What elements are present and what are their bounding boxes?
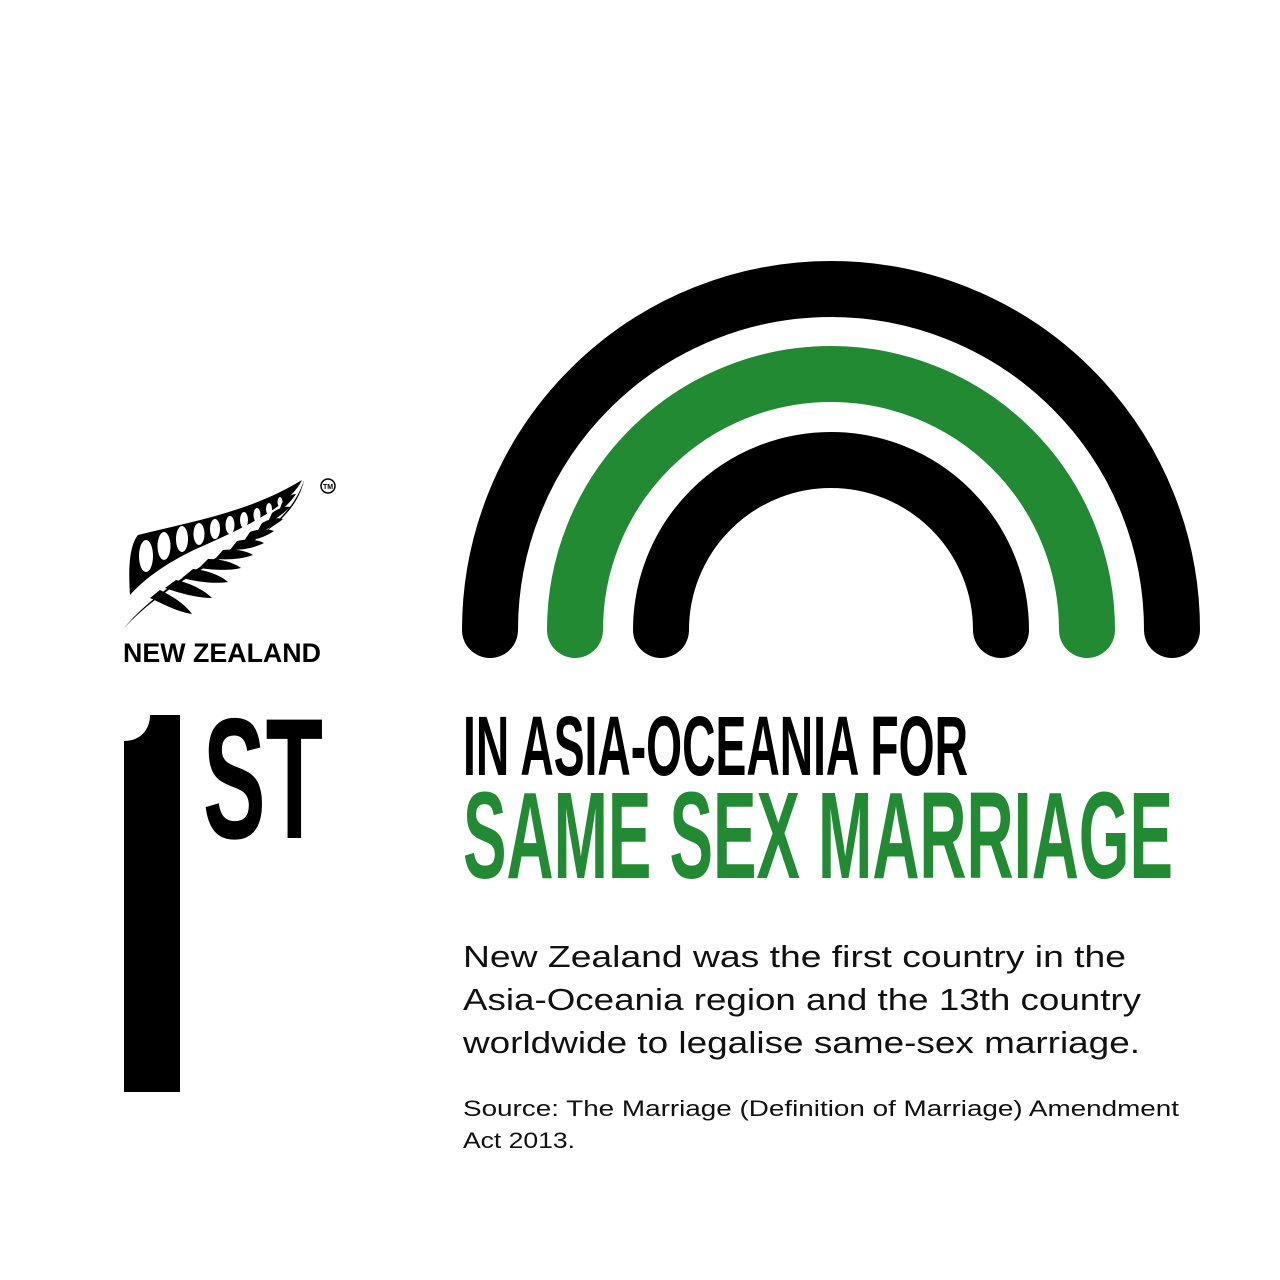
logo: new zealand fern [123, 479, 335, 668]
digit 1 [124, 715, 180, 1092]
logo text: NEW ZEALAND [123, 638, 321, 668]
body text: New Zealand was the first country in the [463, 939, 1126, 974]
source note: Act 2013. [463, 1128, 575, 1153]
body text [462, 939, 1142, 1060]
superscript ST: ST [203, 683, 323, 875]
body text: Asia-Oceania region and the 13th country [463, 982, 1142, 1017]
icon: trademark: TM [323, 484, 333, 491]
big number 1st [124, 683, 323, 1092]
source note [463, 1096, 1179, 1153]
arcs graphic [490, 289, 1172, 630]
body text: worldwide to legalise same-sex marriage. [462, 1025, 1140, 1060]
icon: trademark [321, 479, 335, 493]
source note: Source: The Marriage (Definition of Marriage) Amendment [463, 1096, 1179, 1121]
icon: fern [124, 480, 304, 628]
